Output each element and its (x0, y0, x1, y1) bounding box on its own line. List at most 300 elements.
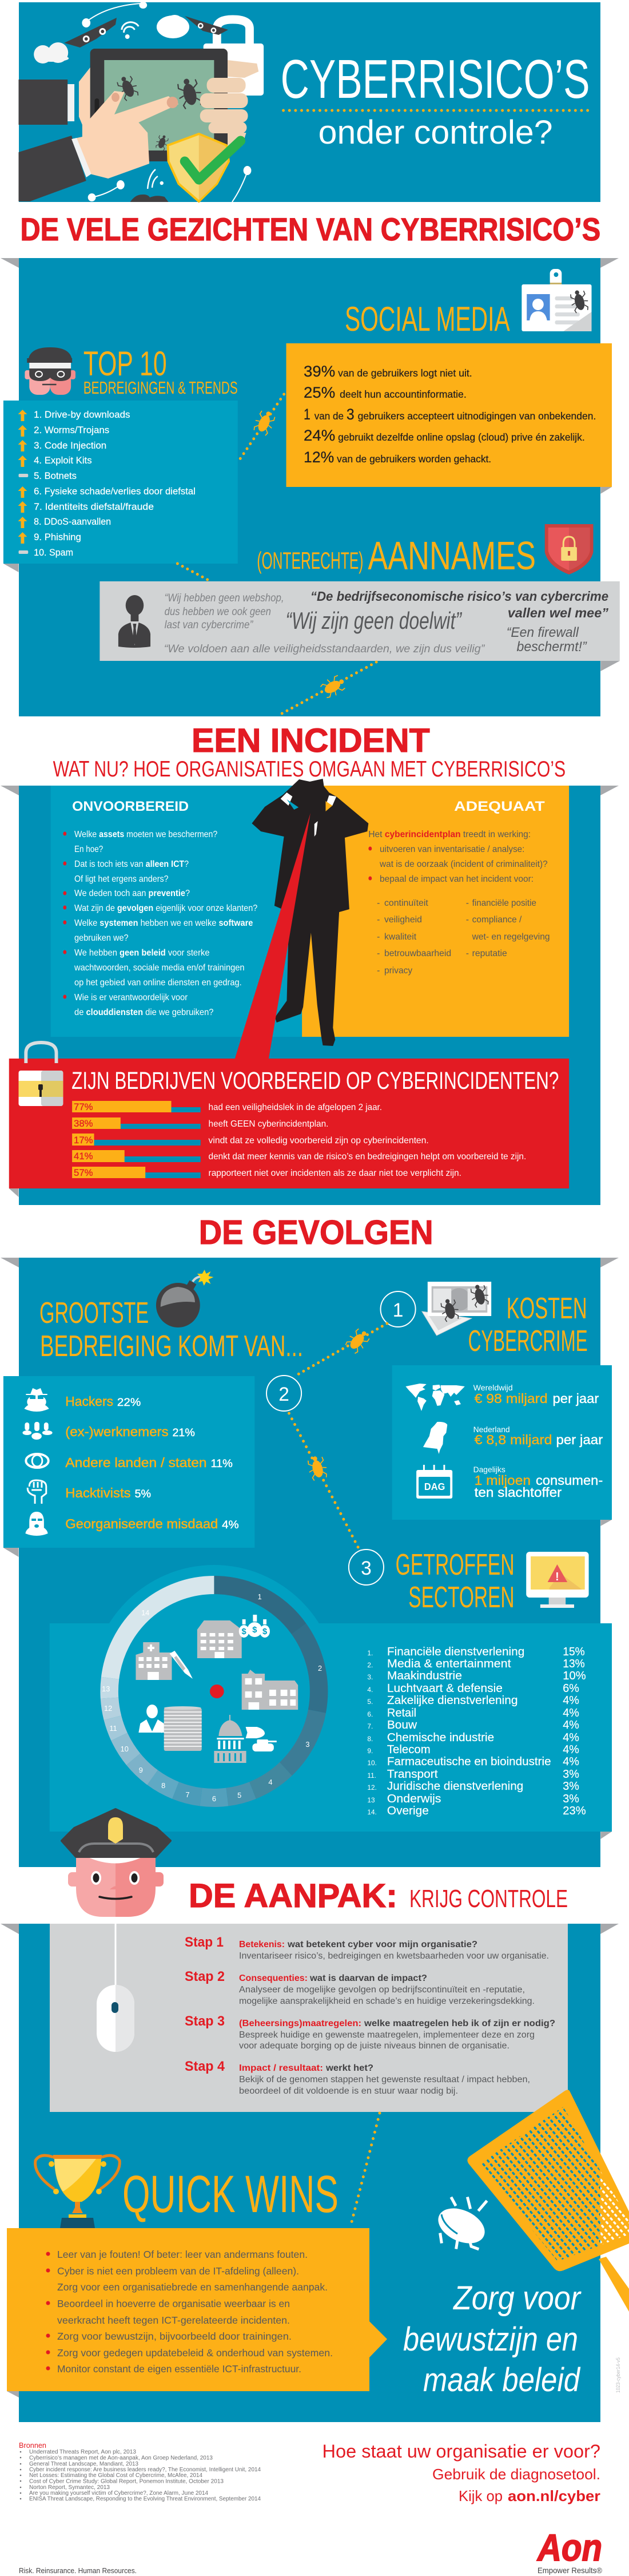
list: adequaat response: kwaliteit (384, 932, 417, 942)
icon: financial building with money bags: $ (242, 1627, 246, 1636)
list text: Zorg voor gedegen updatebeleid & onderhoud van systemen. (57, 2347, 333, 2359)
dotted bug trail: marker 1 to 2 (297, 1323, 387, 1375)
donut labels: 8 (161, 1781, 165, 1790)
callout: zorg voor bewustzijn: maak beleid (423, 2361, 581, 2399)
sources (19, 2441, 261, 2502)
list: sectors: 4% (563, 1719, 579, 1731)
heading: social media: SOCIAL MEDIA (345, 300, 510, 338)
icon: mask bottom (130, 195, 169, 202)
icon: monitor with warning: ! (555, 1571, 559, 1583)
list: sectors: 4% (563, 1707, 579, 1719)
step 4: Bekijk of de genomen stappen het gewenste resultaat / impact hebben, (239, 2075, 530, 2084)
call to action: Gebruik de diagnosetool. (432, 2466, 600, 2483)
threat items: Hackers (65, 1394, 113, 1409)
icon: raised fist (27, 1480, 46, 1504)
list: sectors: 3. (367, 1673, 373, 1681)
list: sectors: 9. (367, 1747, 373, 1755)
list: sectors: 13% (563, 1658, 585, 1670)
step 1: Inventariseer risico’s, bedreigingen en kwetsbaarheden voor uw organisatie. (239, 1951, 549, 1961)
panel: sectors (50, 1623, 612, 1839)
quote: standaarden: “We voldoen aan alle veiligheidsstandaarden, we zijn dus veilig” (164, 643, 485, 655)
quote: webshop: last van cybercrime” (165, 619, 253, 631)
list: onvoorbereid questions: Welke assets moeten we beschermen? (74, 830, 217, 839)
panel: threat sources: 21% (172, 1426, 195, 1438)
list: adequaat response: wat is de oorzaak (incident of criminaliteit)? (379, 859, 548, 869)
list: adequaat response: - (377, 949, 380, 958)
bar chart: preparedness: 57% (74, 1167, 93, 1178)
icon: trophy (35, 2155, 120, 2228)
bar chart: preparedness: denkt dat meer kennis van de risico’s en bedreigingen helpt om voorbereid te zijn. (209, 1152, 526, 1162)
list items: 9. Phishing (34, 532, 81, 542)
cost netherlands: per jaar (556, 1432, 603, 1447)
threat items (65, 1394, 218, 1531)
title dotted divider (284, 109, 590, 112)
list: onvoorbereid questions: En hoe? (74, 845, 103, 854)
cost daily: Dagelijks (473, 1465, 505, 1474)
subheading: krijg controle: KRIJG CONTROLE (409, 1885, 568, 1913)
icon: financial building with money bags (197, 1615, 270, 1658)
callout: zorg voor bewustzijn: bewustzijn en (403, 2321, 578, 2358)
quote: bedrijfseconomische risico's: vallen wel mee” (508, 605, 609, 620)
list items: 1. Drive-by downloads (34, 409, 130, 420)
list text: Beoordeel in hoeverre de organisatie weerbaar is en (57, 2298, 290, 2309)
list: sectors: Farmaceutische en bioindustrie (387, 1755, 551, 1768)
list: adequaat response: bepaal de impact van het incident voor: (380, 874, 534, 884)
list: adequaat response: uitvoeren van inventarisatie / analyse: (380, 845, 524, 854)
heading: kosten cybercrime: KOSTEN (507, 1291, 587, 1325)
list: adequaat response: privacy (384, 966, 412, 976)
illustration: hands holding tablet with bugs (19, 2, 264, 202)
list items: 4. Exploit Kits (34, 455, 92, 466)
list: onvoorbereid questions: de clouddiensten die we gebruiken? (74, 1008, 214, 1017)
list text: Cyber is niet een probleem van de IT-afdeling (alleen). (57, 2265, 299, 2277)
list: adequaat response: wet- en regelgeving (472, 932, 550, 942)
list: sectors: 10% (563, 1670, 586, 1682)
source items: Cost of Cyber Crime Study: Global Report, Ponemon Institute, October 2013 (29, 2479, 224, 2484)
heading: adequaat: ADEQUAAT (454, 799, 545, 814)
step 2: wat is daarvan de impact? (309, 1973, 427, 1983)
threat items: (ex-)werknemers (65, 1424, 169, 1439)
step 1: Stap 1 (185, 1935, 224, 1950)
list: sectors: 4% (563, 1731, 579, 1744)
heading: onvoorbereid: ONVOORBEREID (72, 799, 189, 814)
step 1 (185, 1935, 549, 1961)
step 4 (185, 2059, 530, 2096)
list: adequaat response: compliance / (472, 915, 522, 925)
heading: top 10 (83, 344, 238, 398)
list text: veerkracht heeft tegen ICT-gerelateerde incidenten. (57, 2315, 290, 2326)
list: sectors: Juridische dienstverlening (387, 1780, 523, 1793)
donut labels: 7 (186, 1790, 190, 1799)
list: sectors: 11. (367, 1772, 376, 1780)
call to action: Kijk op (459, 2487, 503, 2504)
panel: threat sources: 22% (117, 1396, 141, 1408)
bar chart: preparedness: vindt dat ze volledig voorbereid zijn op cyberincidenten. (209, 1136, 429, 1146)
list: sectors: 4. (367, 1686, 373, 1694)
list: onvoorbereid questions: op het gebied van online diensten en gedrag. (74, 978, 242, 988)
neutral markers (19, 474, 28, 554)
marker 3: 3 (361, 1558, 372, 1579)
icon: world map (405, 1384, 465, 1411)
donut labels: 14 (141, 1608, 149, 1617)
icon: office tower (164, 1706, 202, 1751)
threat items: Georganiseerde misdaad (65, 1516, 218, 1531)
bar chart: preparedness: had een veiligheidslek in de afgelopen 2 jaar. (209, 1103, 382, 1112)
donut labels: 13 (102, 1685, 110, 1693)
icon: open padlock (19, 1043, 63, 1106)
step 1: wat betekent cyber voor mijn organisatie? (287, 1940, 477, 1949)
icon: financial building with money bags: $ (262, 1627, 268, 1636)
list: sectors: Telecom (387, 1743, 431, 1756)
heading: getroffen sectoren: GETROFFEN (396, 1548, 515, 1581)
step 4: Stap 4 (185, 2059, 225, 2074)
cost daily: consumen- (536, 1473, 603, 1488)
stat 39% (304, 363, 472, 380)
panel: assumptions quotes (99, 581, 620, 671)
list text: Zorg voor bewustzijn, bijvoorbeeld door trainingen. (57, 2331, 292, 2342)
step 2: Consequenties: (239, 1973, 308, 1983)
donut labels: 10 (121, 1745, 129, 1753)
quote: webshop: dus hebben we ook geen (165, 605, 271, 617)
bar chart: preparedness: rapporteert niet over incidenten als ze daar niet toe verplicht zijn. (209, 1168, 461, 1178)
document code: 1023-cyber14-v5 (615, 2357, 621, 2393)
icon: cloud right (157, 15, 189, 38)
step 3: Bespreek huidige en gewenste maatregelen, implementeer deze en zorg (239, 2030, 535, 2040)
list: adequaat response: reputatie (472, 949, 507, 958)
list items: 7. Identiteits diefstal/fraude (34, 501, 154, 512)
quote: webshop: “Wij hebben geen webshop, (165, 592, 284, 604)
list: onvoorbereid questions: Wie is er verantwoordelijk voor (74, 993, 188, 1002)
list items: 5. Botnets (34, 470, 77, 481)
step 3: Stap 3 (185, 2014, 225, 2029)
dotted trail: steps to quick wins (351, 2113, 380, 2226)
list: sectors: 15% (563, 1646, 585, 1658)
panel: onvoorbereid background (51, 786, 302, 1037)
step 4: beoordeel of dit voldoende is en stuur waar nodig bij. (239, 2086, 458, 2096)
list: sectors: 3% (563, 1768, 579, 1781)
icon: eye (26, 1454, 49, 1468)
list: sectors: Maakindustrie (387, 1670, 462, 1682)
list: sectors: 4% (563, 1755, 579, 1768)
step 3: voor adequate borging op de juiste niveaus binnen de organisatie. (239, 2041, 509, 2051)
list: sectors: Chemische industrie (387, 1731, 494, 1744)
list: sectors: Retail (387, 1707, 416, 1719)
stat 39%: 39% (304, 363, 335, 380)
icon: bugs on screen (115, 73, 204, 150)
list text (57, 2249, 333, 2375)
stat 1 van de 3: 3 (347, 406, 355, 423)
list items: 6. Fysieke schade/verlies door diefstal (34, 486, 196, 497)
donut labels: 3 (305, 1740, 310, 1749)
list text: Leer van je fouten! Of beter: leer van andermans fouten. (57, 2249, 308, 2260)
panel: een incident background (19, 786, 600, 1205)
step 3: welke maatregelen heb ik of zijn er nodig? (364, 2019, 555, 2028)
panel: cost figures (392, 1365, 612, 1526)
threat items: Andere landen / staten (65, 1455, 207, 1470)
stat 12%: 12% (304, 449, 334, 466)
donut labels: 11 (109, 1724, 117, 1733)
icon: monitor with warning (526, 1552, 589, 1608)
cost worldwide (473, 1383, 599, 1406)
source bullets (20, 2451, 21, 2499)
list: onvoorbereid questions: wachtwoorden, sociale media en/of trainingen (74, 963, 245, 973)
heading: top 10: TOP 10 (83, 344, 167, 383)
list: adequaat response: - (377, 966, 380, 976)
stat 1 van de 3: 1 (304, 406, 310, 423)
stat 1 van de 3: van de (314, 410, 344, 422)
list: sectors: 6% (563, 1682, 579, 1695)
logo tagline: Empower Results® (538, 2566, 603, 2575)
center dot (210, 1685, 224, 1698)
list items: 10. Spam (34, 547, 73, 558)
tablet (90, 49, 228, 161)
icon: fly swatter (457, 2083, 629, 2312)
icon: business person with dollar: $ (158, 1721, 165, 1735)
heading: quick wins: QUICK WINS (122, 2165, 339, 2224)
sleeve lower (19, 136, 91, 201)
step 3: (Beheersings)maatregelen: (239, 2019, 361, 2028)
quote: bedrijfseconomische risico's: “De bedrijfseconomische risico’s van cybercrime (310, 589, 608, 604)
icon: burglar (25, 347, 75, 395)
list: onvoorbereid questions: Welke systemen hebben we en welke software (74, 918, 253, 928)
list: adequaat response: - (466, 949, 469, 958)
list: sectors: 4% (563, 1694, 579, 1707)
cost netherlands (473, 1425, 603, 1447)
icon: shield with check (168, 134, 241, 201)
marker 1 (381, 1291, 416, 1327)
source items: Norton Report, Symantec, 2013 (29, 2484, 110, 2491)
icon: wifi bottom (148, 169, 163, 189)
list: sectors: Overige (387, 1805, 429, 1817)
stat 25%: 25% (304, 384, 335, 401)
step 2: mogelijke aansprakelijkheid en schade’s en huidige verzekeringsdekking. (239, 1996, 535, 2006)
dotted bug trail: top 10 to social media (238, 394, 284, 462)
cost daily: 1 miljoen (475, 1473, 531, 1488)
list: sectors (367, 1646, 586, 1817)
title (281, 49, 590, 151)
step 2: Stap 2 (185, 1969, 225, 1984)
panel: top 10 list (3, 401, 238, 572)
quote: webshop (165, 592, 284, 631)
list items: 2. Worms/Trojans (34, 425, 109, 435)
list items: 8. DDoS-aanvallen (34, 516, 111, 527)
icon: business person (118, 595, 150, 648)
callout: zorg voor bewustzijn: Zorg voor (452, 2280, 582, 2317)
heading: getroffen sectoren: SECTOREN (408, 1580, 515, 1614)
icon: cloud left (34, 42, 69, 64)
list: adequaat response: continuïteit (384, 898, 428, 908)
bar chart: preparedness: 77% (74, 1101, 93, 1112)
bullets (46, 2252, 50, 2370)
list: sectors: Onderwijs (387, 1793, 441, 1805)
source items: General Threat Landscape, Mandiant, 2013 (29, 2461, 138, 2467)
cost netherlands: Nederland (473, 1425, 510, 1434)
source items (29, 2449, 261, 2502)
heading: de aanpak: DE AANPAK: (189, 1877, 397, 1915)
list: sectors: 7. (367, 1722, 373, 1730)
stat 12%: van de gebruikers worden gehackt. (337, 453, 491, 465)
panel: de gevolgen background (19, 1258, 600, 1867)
cost netherlands: € 8,8 miljard (475, 1432, 552, 1447)
sleeve upper (19, 80, 74, 125)
list: onvoorbereid questions: We deden toch aan preventie? (74, 889, 190, 898)
list: adequaat response: - (377, 915, 380, 925)
list: sectors: Media & entertainment (387, 1658, 511, 1670)
heading: grootste bedreiging (39, 1296, 303, 1362)
panel: de vele gezichten background (19, 258, 600, 716)
donut labels: 2 (318, 1664, 322, 1673)
panel: threat sources: 4% (222, 1519, 239, 1531)
list: adequaat response: betrouwbaarheid (384, 949, 451, 958)
list: sectors: 12. (367, 1784, 377, 1792)
list: onvoorbereid questions: gebruiken we? (74, 933, 129, 943)
list: sectors: Zakelijke dienstverlening (387, 1694, 517, 1707)
list: sectors: Bouw (387, 1719, 417, 1731)
icon: business person with dollar (138, 1705, 165, 1735)
panel: threat sources (3, 1376, 254, 1557)
threat items: Hacktivists (65, 1485, 131, 1500)
quote: firewall: beschermt!” (516, 639, 587, 655)
heading: kosten cybercrime (468, 1291, 588, 1357)
cost daily (473, 1465, 603, 1500)
icon: red tie (235, 813, 310, 1059)
marker 2 (266, 1376, 301, 1411)
source items: ENISA Threat Landscape, Responding to the Evolving Threat Environment, September 2014 (29, 2496, 261, 2502)
panel: threat sources: 5% (134, 1488, 151, 1500)
icon: mask left (64, 18, 117, 47)
quote: geen doelwit: “Wij zijn geen doelwit” (286, 607, 463, 634)
icon: calendar day: DAG (424, 1481, 445, 1492)
heading: onterechte aannames: (ONTERECHTE) (257, 547, 363, 574)
logo: aon: Aon (536, 2526, 602, 2569)
source items: Cyber incident response: Are business leaders ready?, The Economist, Intelligent Unit, 2014 (29, 2467, 261, 2473)
quote: bedrijfseconomische risico's (310, 589, 609, 620)
list: onvoorbereid questions: Dat is toch iets van alleen ICT? (74, 859, 189, 869)
sources heading: Bronnen (19, 2441, 46, 2450)
dotted bug trail: assumptions to incident (278, 662, 376, 716)
trend arrows (18, 410, 27, 544)
donut labels (102, 1592, 322, 1803)
list: sectors: 13 (367, 1796, 375, 1804)
footer tagline: Risk. Reinsurance. Human Resources. (19, 2566, 137, 2575)
source items: Net Losses: Estimating the Global Cost of Cybercrime, McAfee, 2014 (29, 2472, 202, 2479)
list: onvoorbereid questions (63, 830, 257, 1017)
list text: Zorg voor een organisatiebrede en samenhangende aanpak. (57, 2281, 328, 2293)
bar chart: preparedness (72, 1101, 526, 1178)
step 4: Impact / resultaat: (239, 2063, 323, 2073)
heading: de gevolgen: DE GEVOLGEN (199, 1214, 433, 1251)
icon: padlock (204, 19, 264, 96)
icon: financial building with money bags: $ (252, 1626, 257, 1635)
panel: hero background (19, 2, 600, 202)
icon: policeman (62, 1809, 170, 1917)
icon: bomb (156, 1270, 213, 1327)
source items: Underrated Threats Report, Aon plc, 2013 (29, 2449, 136, 2455)
step 4: werkt het? (325, 2063, 373, 2073)
icon: banknotes with bugs (422, 1282, 491, 1335)
icon: network line and nodes (82, 2, 147, 27)
icon: employees (22, 1422, 53, 1440)
panel: quick wins list (7, 2228, 387, 2397)
list: onvoorbereid questions: Wat zijn de gevolgen eigenlijk voor onze klanten? (74, 903, 257, 913)
stat 25%: deelt hun accountinformatie. (340, 389, 467, 400)
hero and top sections (3, 2, 620, 1839)
quote: firewall: “Een firewall (507, 625, 579, 640)
heading: een incident: EEN INCIDENT (192, 723, 430, 759)
stat 39%: van de gebruikers logt niet uit. (338, 367, 472, 379)
heading: getroffen sectoren (396, 1548, 515, 1614)
donut labels: 1 (258, 1592, 262, 1601)
subtitle: onder controle? (319, 114, 553, 151)
list: sectors: 3% (563, 1780, 579, 1793)
bar chart: preparedness: heeft GEEN cyberincidentplan. (209, 1119, 328, 1129)
panel: zijn bedrijven voorbereid (9, 1043, 569, 1197)
list: sectors: 8. (367, 1735, 373, 1743)
callout: zorg voor bewustzijn (403, 2280, 582, 2399)
icon: hospital with syringe (136, 1642, 193, 1680)
list: adequaat response: - (466, 898, 469, 908)
list: sectors: 3% (563, 1793, 579, 1805)
panel: threat sources: 11% (210, 1457, 233, 1469)
cost daily: ten slachtoffer (475, 1485, 562, 1500)
icon: network nodes bottom (88, 166, 251, 202)
source items: Cyberrisico’s managen met de Aon-aanpak, Aon Groep Nederland, 2013 (29, 2455, 213, 2462)
icon: plane and tank (246, 1727, 277, 1751)
bar chart: preparedness: 41% (74, 1151, 93, 1162)
list: adequaat response: - (466, 915, 469, 925)
stat 1 van de 3 (304, 406, 596, 423)
heading: onterechte aannames (257, 533, 536, 578)
list: adequaat response: - (377, 932, 380, 942)
list: sectors: 1. (367, 1649, 373, 1657)
step 3 (185, 2014, 555, 2051)
icon: id card with bug (521, 269, 592, 331)
cost worldwide: per jaar (553, 1391, 599, 1406)
icon: wifi top (122, 22, 138, 38)
icon: government capitol (214, 1715, 246, 1763)
icon: factory (242, 1670, 298, 1710)
panel: social media stats (286, 343, 612, 494)
list: sectors: 10. (367, 1759, 377, 1767)
icon: mask right (185, 16, 228, 35)
list: sectors: Transport (387, 1768, 438, 1781)
bullets (63, 832, 66, 999)
stat 12% (304, 449, 491, 466)
icon: white bug (433, 2198, 490, 2250)
call to action (323, 2441, 600, 2504)
bar chart: preparedness: 38% (74, 1118, 93, 1129)
quote: firewall (507, 625, 587, 655)
stat 24%: 24% (304, 427, 335, 444)
list: adequaat response: Het cyberincidentplan treedt in werking: (368, 830, 531, 839)
stat 24%: gebruikt dezelfde online opslag (cloud) prive én zakelijk. (338, 431, 585, 443)
list: onvoorbereid questions: Of ligt het ergens anders? (74, 874, 169, 884)
list: adequaat response (368, 830, 550, 976)
donut labels: 5 (237, 1791, 241, 1800)
list: sectors: 23% (563, 1805, 586, 1817)
list: sectors: 5. (367, 1698, 373, 1706)
dotted trail: list to assumptions (177, 564, 210, 581)
stat 24% (304, 427, 585, 444)
list: onvoorbereid questions: We hebben geen beleid voor sterke (74, 948, 210, 958)
icon: computer mouse (97, 1924, 134, 2052)
list: adequaat response: veiligheid (384, 915, 422, 925)
illustration: silhouette of worried businessman (252, 779, 368, 1046)
list: sectors: 6. (367, 1710, 373, 1718)
icon: netherlands map (423, 1422, 447, 1454)
banner fold shapes (1, 258, 619, 1934)
heading: onterechte aannames: AANNAMES (368, 533, 536, 578)
